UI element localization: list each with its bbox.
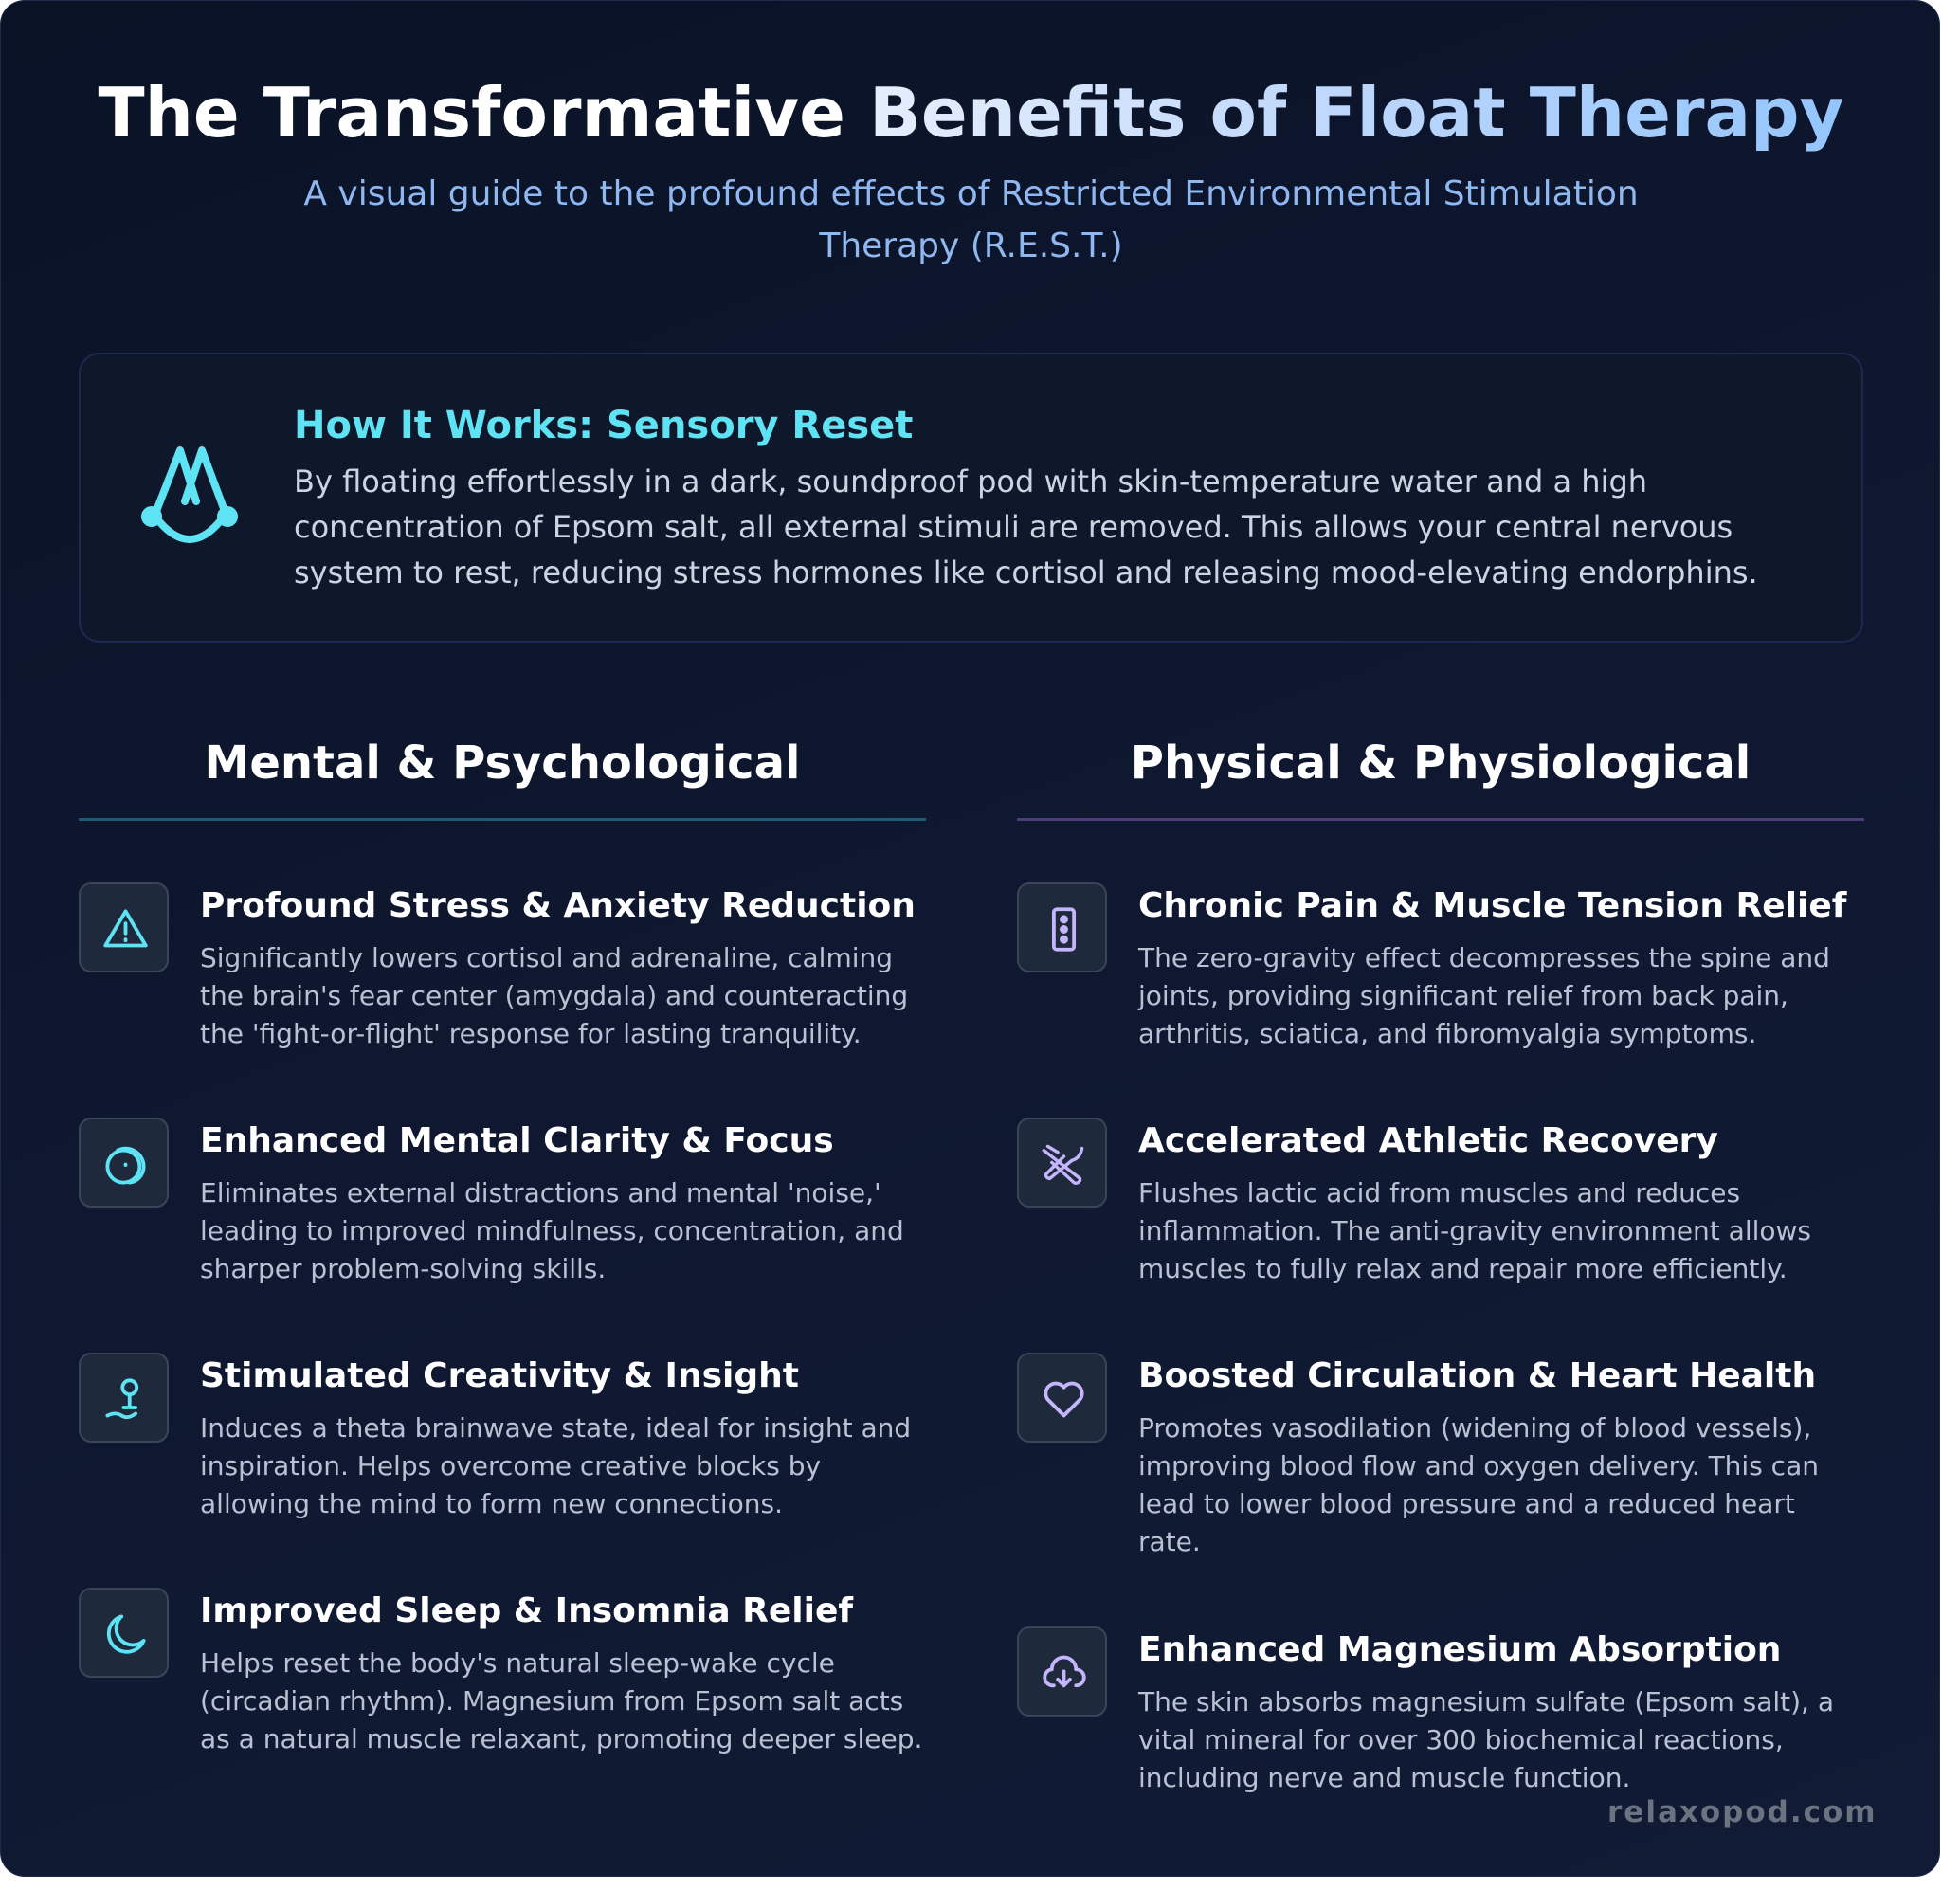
card background: Eliminates external distractions and mental 'noise,' leading to improved mindfulness, concentration, and sharper problem-solving skills. xyxy=(200,1177,904,1284)
item: magnesium xyxy=(1017,1626,1834,1793)
card background: Boosted Circulation & Heart Health xyxy=(1138,1356,1816,1395)
item: pain xyxy=(1017,882,1847,1049)
title: The Transformative Benefits of Float Therapy xyxy=(98,73,1844,153)
card background: Helps reset the body's natural sleep-wake cycle (circadian rhythm). Magnesium from Epsom salt acts as a natural muscle relaxant, promoting deeper sleep. xyxy=(200,1647,922,1754)
item: recovery xyxy=(1017,1118,1811,1284)
card background: Enhanced Magnesium Absorption xyxy=(1138,1630,1781,1669)
subtitle: A visual guide to the profound effects of Restricted Environmental Stimulation Therapy (R.E.S.T.) xyxy=(303,174,1639,265)
icon: spine xyxy=(1017,882,1107,972)
card background: Induces a theta brainwave state, ideal for insight and inspiration. Helps overcome creative blocks by allowing the mind to form new connections. xyxy=(200,1412,911,1519)
icon: meditation xyxy=(141,446,238,543)
card background: Significantly lowers cortisol and adrenaline, calming the brain's fear center (amygdala) and counteracting the 'fight-or-flight' response for lasting tranquility. xyxy=(200,942,908,1049)
item: creativity xyxy=(79,1353,911,1519)
item: circulation xyxy=(1017,1353,1819,1557)
icon: heart xyxy=(1017,1353,1107,1443)
item: stress xyxy=(79,882,916,1049)
card background: Stimulated Creativity & Insight xyxy=(200,1356,799,1395)
card background: Improved Sleep & Insomnia Relief xyxy=(200,1591,853,1630)
card background: Promotes vasodilation (widening of blood vessels), improving blood flow and oxygen delivery. This can lead to lower blood pressure and a reduced heart rate. xyxy=(1138,1412,1819,1557)
card background: Profound Stress & Anxiety Reduction xyxy=(200,886,916,925)
card background: The zero-gravity effect decompresses the spine and joints, providing significant relief from back pain, arthritis, sciatica, and fibromyalgia symptoms. xyxy=(1138,942,1830,1049)
icon: warning xyxy=(79,882,169,972)
panel: how it works xyxy=(79,353,1863,643)
card background: Accelerated Athletic Recovery xyxy=(1138,1121,1718,1160)
card background: Enhanced Mental Clarity & Focus xyxy=(200,1121,834,1160)
icon: circle xyxy=(79,1118,169,1208)
card background: Chronic Pain & Muscle Tension Relief xyxy=(1138,886,1846,925)
icon: moon xyxy=(79,1588,169,1678)
heading: physical: Physical & Physiological xyxy=(1131,736,1751,790)
heading: How It Works: Sensory Reset xyxy=(294,404,913,447)
item: sleep xyxy=(79,1588,922,1754)
icon: tools xyxy=(1017,1118,1107,1208)
icon: insight xyxy=(79,1353,169,1443)
text block: By floating effortlessly in a dark, soundproof pod with skin-temperature water and a high concentration of Epsom salt, all external stimuli are removed. This allows your central nervous system to rest, reducing stress hormones like cortisol and releasing mood-elevating endorphins. xyxy=(294,463,1758,591)
item: clarity xyxy=(79,1118,904,1284)
heading: mental: Mental & Psychological xyxy=(205,736,800,790)
card background: The skin absorbs magnesium sulfate (Epsom salt), a vital mineral for over 300 biochemical reactions, including nerve and muscle function. xyxy=(1138,1686,1834,1793)
card background: Flushes lactic acid from muscles and reduces inflammation. The anti-gravity environment allows muscles to fully relax and repair more efficiently. xyxy=(1138,1177,1811,1284)
icon: cloud download xyxy=(1017,1626,1107,1717)
footer brand: relaxopod.com xyxy=(1607,1795,1878,1829)
